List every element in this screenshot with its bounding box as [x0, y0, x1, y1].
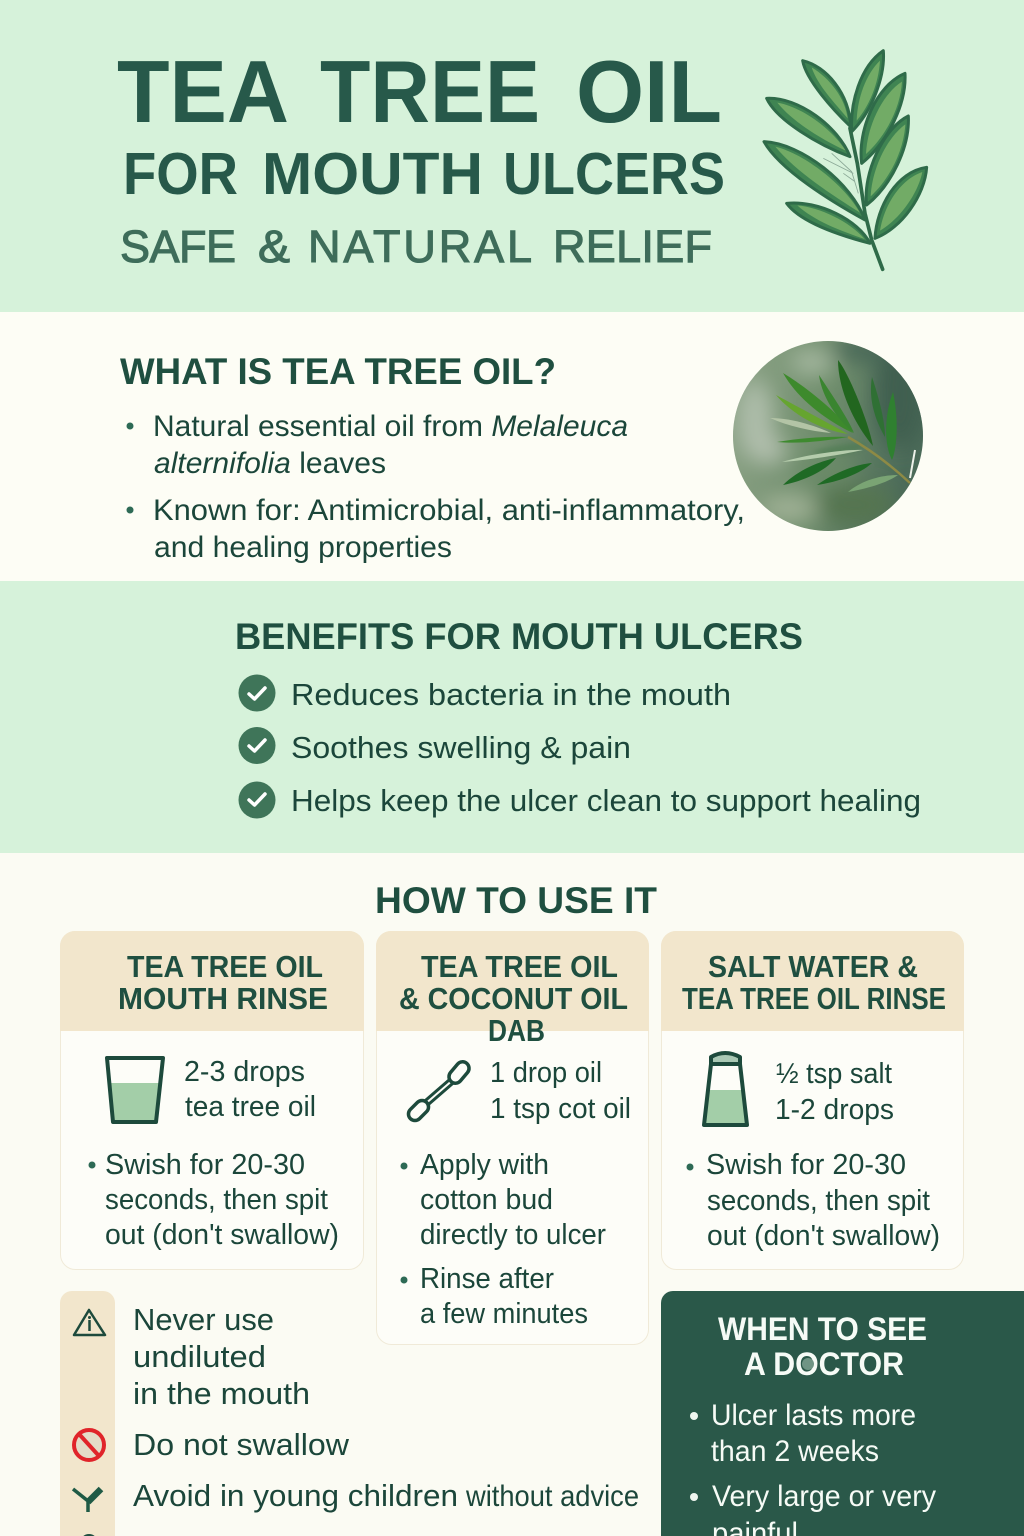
panel: warnings: [60, 1291, 639, 1536]
panel: how to use background: [0, 853, 1024, 1536]
heading: WHAT IS TEA TREE OIL?: [120, 351, 556, 392]
heading: WHEN TO SEE: [718, 1311, 927, 1347]
doctor list: Very large or very: [712, 1480, 936, 1513]
benefit 1: Reduces bacteria in the mouth: [291, 677, 731, 712]
directions: Rinse after: [420, 1263, 554, 1295]
tagline: RELIEF: [553, 221, 712, 272]
icon: check: [238, 674, 276, 712]
card title: SALT WATER &: [708, 949, 918, 984]
warning text 1: [133, 1302, 310, 1411]
icon: salt shaker: [704, 1053, 747, 1125]
bullet list: alternifolia leaves: [154, 447, 386, 480]
directions: Apply with: [420, 1149, 549, 1181]
ingredients: 1 drop oil: [490, 1057, 602, 1089]
directions: [686, 1149, 940, 1252]
card title: TEA TREE OIL: [127, 949, 323, 984]
tagline: [120, 221, 712, 272]
doctor list: than 2 weeks: [711, 1435, 879, 1468]
icon: tea tree sprig: [764, 51, 927, 269]
warning text 1: undiluted: [133, 1339, 266, 1374]
warning text 1: in the mouth: [133, 1376, 310, 1411]
directions: seconds, then spit: [707, 1185, 930, 1217]
subtitle: ULCERS: [503, 141, 725, 207]
tagline: NATURAL: [308, 221, 532, 272]
card title: DAB: [488, 1013, 545, 1048]
bullet list: Known for: Antimicrobial, anti-inflammatory,: [153, 494, 745, 527]
directions: [88, 1149, 339, 1251]
warning text 1: Never use: [133, 1302, 274, 1337]
directions: directly to ulcer: [420, 1219, 606, 1251]
title: OIL: [576, 42, 722, 141]
warning text 3: Avoid in young children: [133, 1478, 458, 1513]
benefit 2: Soothes swelling & pain: [291, 730, 631, 765]
card: coconut oil dab: [376, 931, 649, 1344]
title: [117, 42, 722, 141]
panel: benefits: [0, 581, 1024, 853]
bullet list: [126, 410, 745, 564]
heading: how to use it: HOW TO USE IT: [375, 880, 657, 921]
icon: prohibition: [74, 1430, 104, 1460]
bullet list: Natural essential oil from Melaleuca: [153, 410, 628, 443]
icon: partly visible: [80, 1534, 98, 1536]
panel: what is tea tree oil: [120, 341, 923, 563]
directions: Swish for 20-30: [105, 1149, 305, 1181]
directions: seconds, then spit: [105, 1184, 328, 1216]
ingredients: [184, 1056, 316, 1123]
tagline: &: [258, 221, 290, 272]
directions: cotton bud: [420, 1184, 553, 1216]
card title: [118, 949, 328, 1016]
icon: warning triangle: [74, 1310, 105, 1335]
subtitle: [123, 141, 725, 207]
card title: MOUTH RINSE: [118, 981, 328, 1016]
card title: TEA TREE OIL: [421, 949, 618, 984]
card: salt water rinse: [661, 931, 964, 1270]
icon: child caution: [73, 1489, 101, 1512]
icon: glass: [107, 1058, 163, 1122]
subtitle: MOUTH: [262, 141, 483, 207]
doctor list: Ulcer lasts more: [711, 1399, 916, 1432]
photo: tea tree branch: [733, 338, 926, 531]
heading: A DOCTOR: [744, 1346, 904, 1382]
icon: cotton swab: [406, 1059, 472, 1123]
ingredients: [490, 1057, 631, 1125]
tagline: SAFE: [120, 221, 236, 272]
ingredients: 1 tsp cot oil: [490, 1093, 631, 1125]
warning text 3: [133, 1478, 639, 1513]
panel: when to see a doctor: [661, 1291, 1024, 1536]
ingredients: tea tree oil: [185, 1091, 316, 1123]
directions: out (don't swallow): [707, 1220, 940, 1252]
doctor list: [690, 1399, 936, 1536]
card title: [682, 949, 946, 1016]
title: TEA: [117, 42, 289, 141]
directions: Swish for 20-30: [706, 1149, 906, 1181]
card title: & COCONUT OIL: [399, 981, 628, 1016]
icon: check: [238, 782, 276, 818]
warning text 2: Do not swallow: [133, 1427, 350, 1462]
ingredients: [775, 1058, 894, 1126]
directions: out (don't swallow): [105, 1219, 339, 1251]
heading: [718, 1311, 927, 1382]
ingredients: ½ tsp salt: [776, 1058, 892, 1090]
ingredients: 1-2 drops: [775, 1094, 894, 1126]
title: TREE: [320, 42, 540, 141]
subtitle: FOR: [123, 141, 238, 207]
directions: a few minutes: [420, 1298, 588, 1330]
icon: check: [238, 727, 276, 764]
directions: [400, 1149, 606, 1330]
benefit 3: Helps keep the ulcer clean to support healing: [291, 783, 921, 818]
card title: TEA TREE OIL RINSE: [682, 981, 946, 1016]
bullet list: and healing properties: [154, 531, 452, 564]
ingredients: 2-3 drops: [184, 1056, 305, 1088]
card: mouth rinse: [60, 931, 364, 1270]
warning text 3: without advice: [465, 1480, 639, 1513]
heading: BENEFITS FOR MOUTH ULCERS: [235, 616, 803, 657]
card title: [399, 949, 628, 1048]
panel: header: [0, 0, 1024, 312]
